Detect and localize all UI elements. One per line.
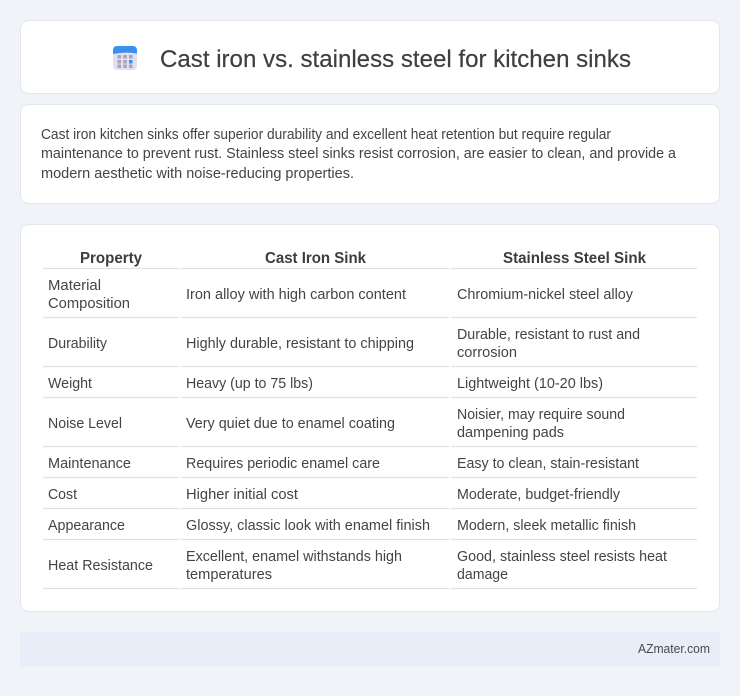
- title: Cast iron vs. stainless steel for kitchen sinks: [160, 46, 631, 73]
- row: noise level: [48, 407, 625, 441]
- table header row: Property: [80, 250, 142, 267]
- row: durability: Durability: [48, 336, 108, 352]
- intro text: maintenance to prevent rust. Stainless steel sinks resist corrosion, are easier to clean, and provide a: [41, 146, 676, 162]
- row: noise level: Noise Level: [48, 416, 122, 432]
- row: durability: [48, 327, 640, 361]
- row: durability: Durable, resistant to rust and: [457, 327, 640, 343]
- row: material composition: Material: [48, 278, 101, 294]
- table header row: [80, 250, 646, 267]
- row: appearance: [48, 518, 636, 534]
- row: weight: Heavy (up to 75 lbs): [186, 376, 313, 392]
- row: heat resistance: damage: [457, 567, 508, 583]
- row: material composition: Chromium-nickel steel alloy: [457, 287, 634, 303]
- row: weight: Lightweight (10-20 lbs): [457, 376, 603, 392]
- row: cost: Cost: [48, 487, 77, 503]
- intro text: [41, 127, 676, 182]
- row: heat resistance: Heat Resistance: [48, 558, 153, 574]
- row: noise level: dampening pads: [457, 425, 564, 441]
- intro text: modern aesthetic with noise-reducing properties.: [41, 166, 354, 182]
- icon: calendar: [113, 46, 137, 70]
- row: maintenance: Maintenance: [48, 456, 131, 472]
- footer: [20, 632, 720, 666]
- table header row: Cast Iron Sink: [265, 250, 366, 267]
- row: material composition: Iron alloy with high carbon content: [186, 287, 406, 303]
- row: durability: corrosion: [457, 345, 517, 361]
- row: maintenance: Easy to clean, stain-resistant: [457, 456, 639, 472]
- row: appearance: Glossy, classic look with enamel finish: [186, 518, 430, 534]
- row: maintenance: [48, 456, 639, 472]
- row: material composition: Composition: [48, 296, 130, 312]
- row: weight: Weight: [48, 376, 92, 392]
- row: maintenance: Requires periodic enamel care: [186, 456, 380, 472]
- table header row: Stainless Steel Sink: [503, 250, 646, 267]
- row: appearance: Appearance: [48, 518, 125, 534]
- row: heat resistance: Excellent, enamel withstands high: [186, 549, 402, 565]
- row: cost: Moderate, budget-friendly: [457, 487, 621, 503]
- row: noise level: Very quiet due to enamel coating: [186, 416, 395, 432]
- row: cost: [48, 487, 621, 503]
- footer source label: AZmater.com: [638, 641, 710, 656]
- intro text: Cast iron kitchen sinks offer superior durability and excellent heat retention but require regular: [41, 127, 611, 143]
- row: material composition: [48, 278, 634, 312]
- row: weight: [48, 376, 603, 392]
- row: durability: Highly durable, resistant to chipping: [186, 336, 414, 352]
- row: heat resistance: temperatures: [186, 567, 272, 583]
- row: noise level: Noisier, may require sound: [457, 407, 625, 423]
- row: cost: Higher initial cost: [186, 487, 298, 503]
- panel: introduction: [20, 104, 720, 204]
- row: heat resistance: Good, stainless steel resists heat: [457, 549, 667, 565]
- row: heat resistance: [48, 549, 667, 583]
- title card: [20, 20, 720, 94]
- row: appearance: Modern, sleek metallic finish: [457, 518, 636, 534]
- panel: comparison table: [20, 224, 720, 612]
